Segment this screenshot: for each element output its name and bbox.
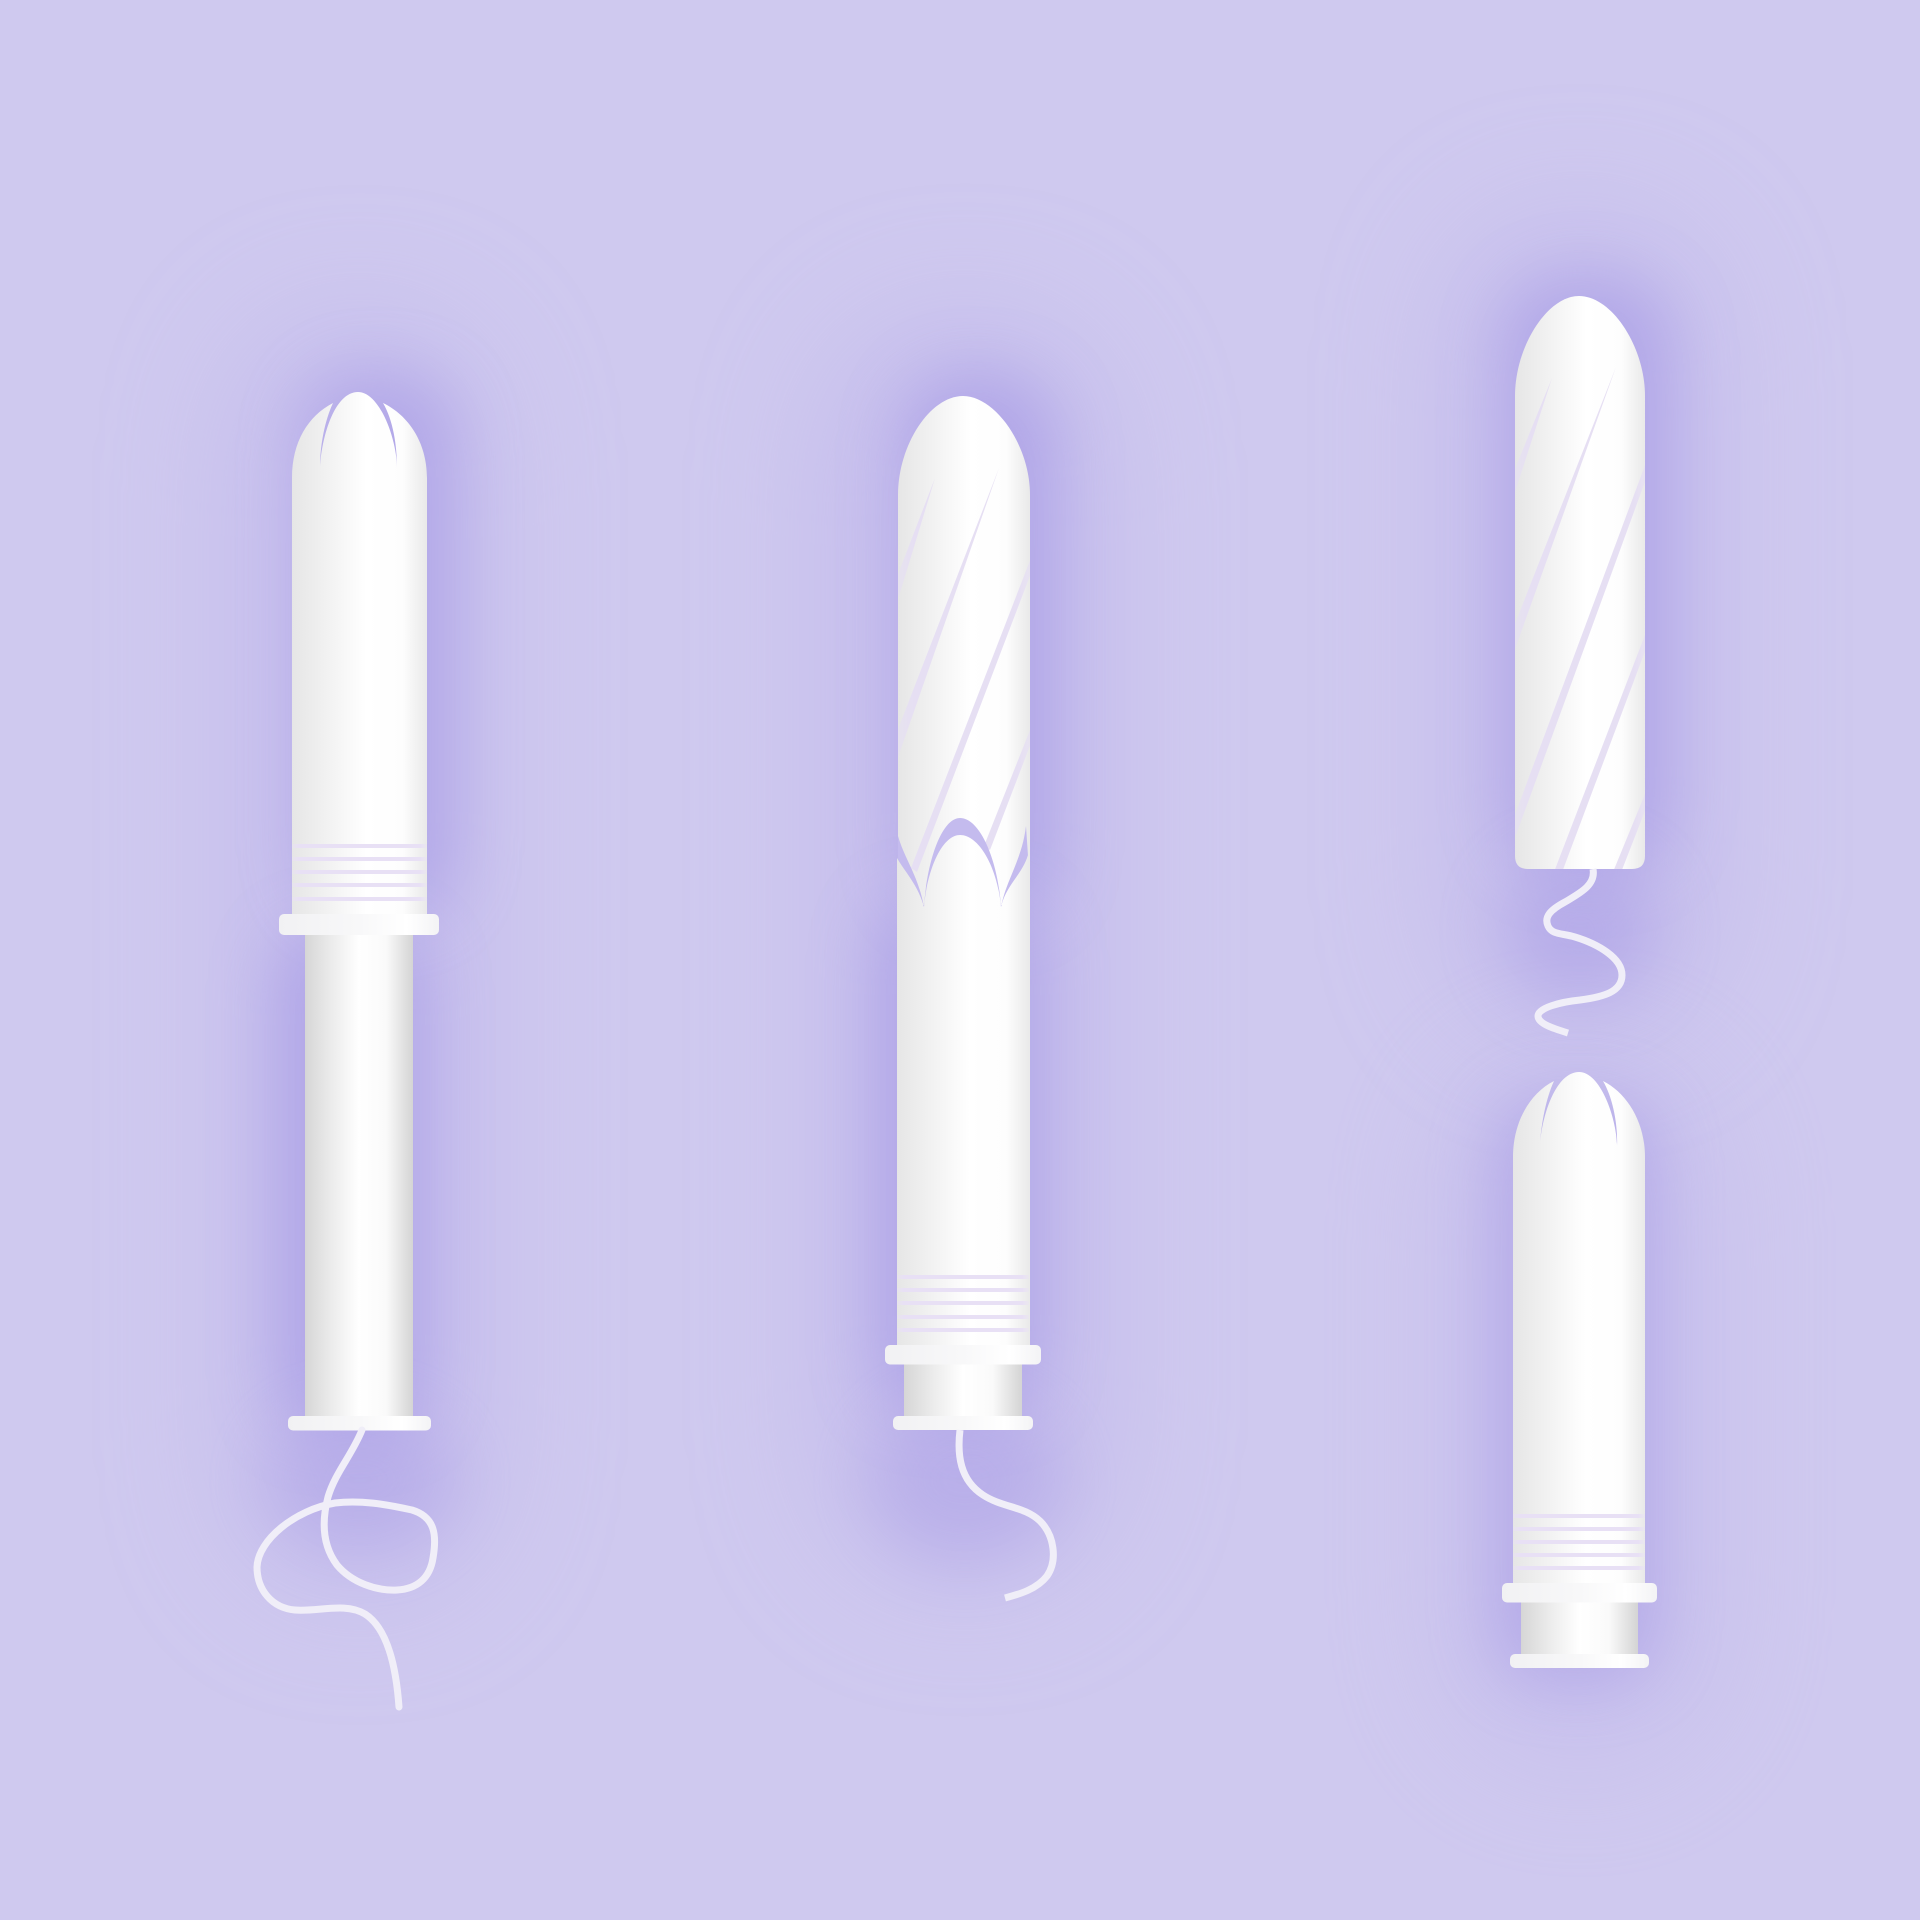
glow: left tampon <box>235 320 485 1590</box>
outer barrel <box>897 835 1030 1350</box>
tampon: right bottom, empty applicator <box>1502 1072 1657 1668</box>
collar ring <box>279 914 439 935</box>
grip lines <box>292 844 427 901</box>
string <box>1538 869 1622 1033</box>
tampon: right top, wrapped tampon <box>1507 296 1650 1033</box>
tampon: middle, wrapped tampon in applicator <box>885 396 1053 1598</box>
string <box>257 1430 435 1707</box>
bottom flange <box>893 1416 1033 1430</box>
bottom flange <box>288 1416 431 1430</box>
tampon: left, assembled applicator <box>257 392 439 1707</box>
tube <box>904 1360 1022 1420</box>
wrapper stripes <box>900 472 1028 872</box>
bottom flange <box>1510 1654 1649 1668</box>
inner tube <box>305 930 413 1420</box>
grip lines <box>1513 1514 1645 1570</box>
opening shadow <box>898 818 1028 910</box>
glow: middle tampon <box>825 320 1105 1580</box>
grip lines <box>897 1275 1029 1332</box>
wrapped tampon tip <box>890 396 1036 905</box>
collar ring <box>885 1345 1041 1364</box>
tube <box>1521 1598 1638 1658</box>
outer barrel with petal tip <box>292 392 427 920</box>
glow: right tampon <box>1450 220 1710 1760</box>
outer barrel with petal tip <box>1513 1072 1645 1590</box>
wrapper stripes <box>1519 372 1644 869</box>
collar ring <box>1502 1583 1657 1602</box>
string <box>959 1430 1053 1598</box>
